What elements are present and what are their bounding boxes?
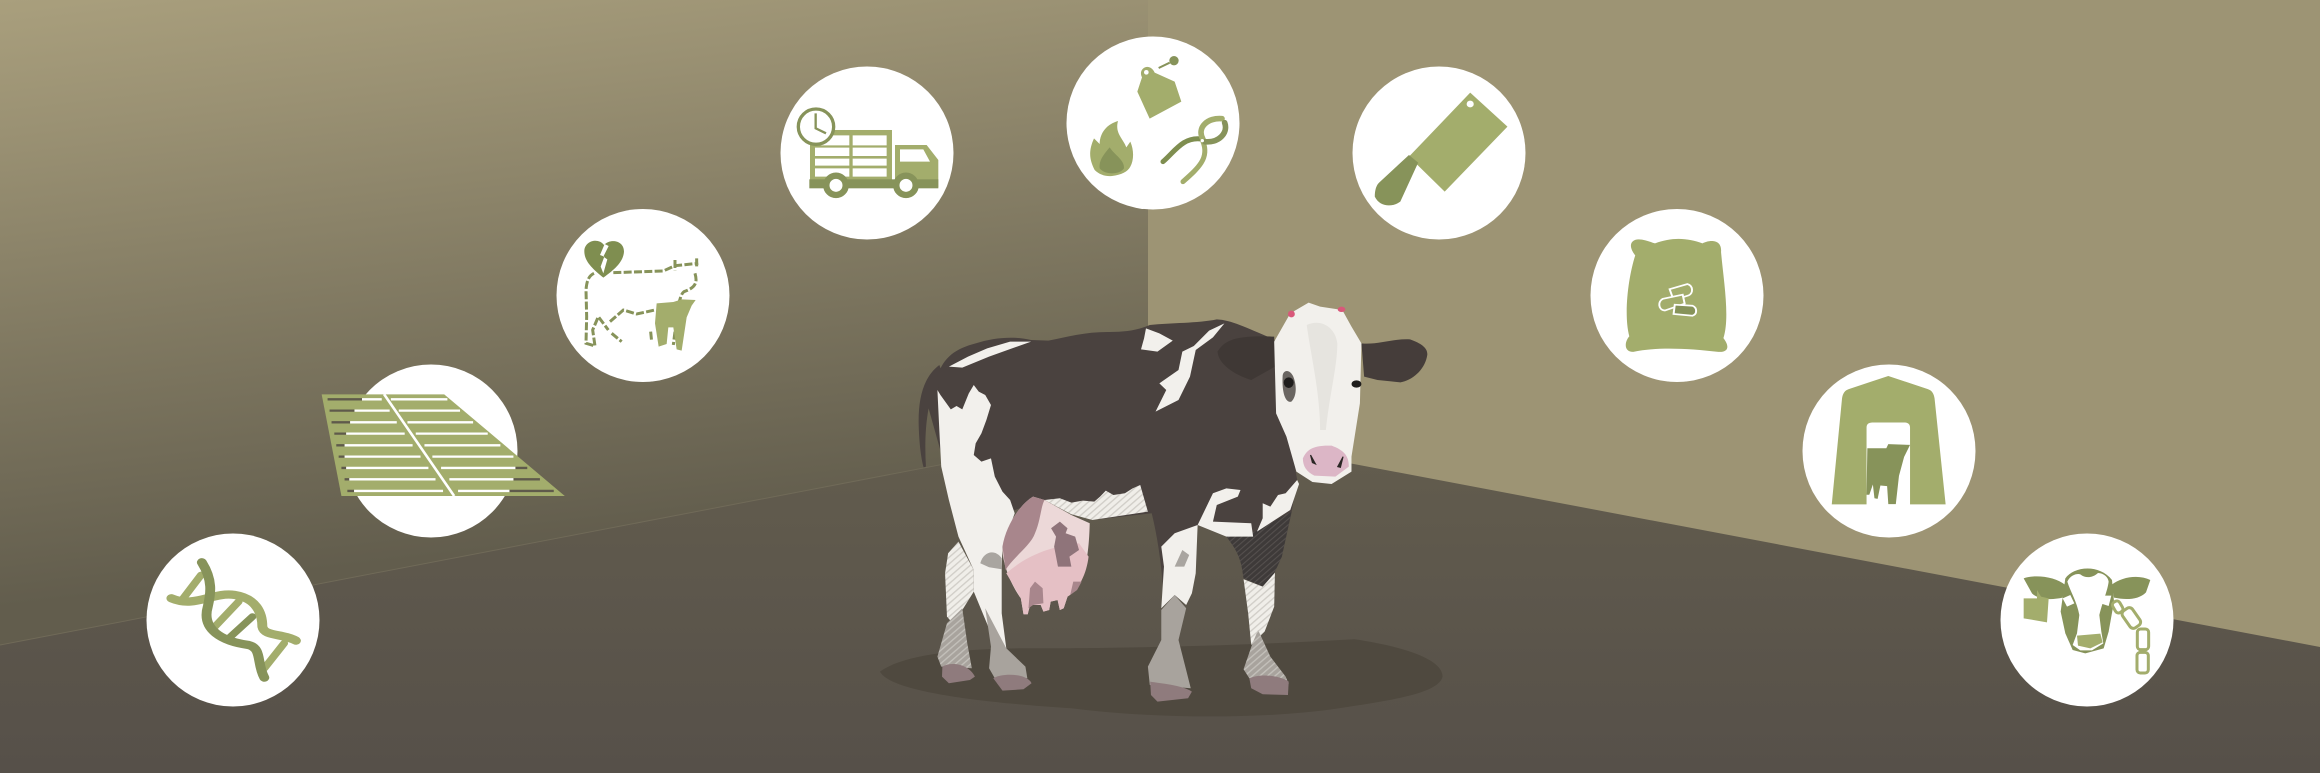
tail bbox=[919, 365, 945, 467]
circle: slatted floor bbox=[322, 364, 565, 538]
left ear bbox=[1218, 336, 1275, 380]
icon: DNA helix bbox=[171, 562, 296, 678]
body dark coat bbox=[937, 319, 1297, 600]
belly hatch bbox=[1045, 485, 1148, 520]
right ear bbox=[1361, 339, 1427, 382]
udder bbox=[1002, 497, 1090, 614]
icon: cleaver bbox=[1375, 93, 1507, 205]
circle: feed bbox=[1590, 209, 1764, 382]
icon: slatted floor panel bbox=[322, 394, 565, 496]
icon: truck with clock bbox=[798, 109, 938, 195]
circle: DNA genetics bbox=[146, 534, 320, 706]
icon: barn with calf bbox=[1832, 376, 1946, 504]
icon: broken heart, cow and calf bbox=[584, 241, 698, 351]
circle: transport time bbox=[780, 66, 954, 240]
head bbox=[1274, 303, 1361, 484]
front far leg hatched bbox=[1226, 512, 1291, 695]
far hind leg bbox=[937, 542, 975, 683]
circle: tethering and tagging bbox=[2000, 534, 2174, 706]
hind hoof bbox=[993, 675, 1032, 691]
hock mark bbox=[980, 552, 1002, 569]
chest white patches bbox=[1198, 480, 1299, 537]
circle: identification and dehorning bbox=[1066, 36, 1240, 210]
hind near lower leg bbox=[985, 608, 1027, 678]
circle: slaughter bbox=[1352, 66, 1526, 240]
hind near leg and rump white bbox=[937, 385, 1015, 648]
circle: calf separation bbox=[556, 209, 730, 382]
circle: housing bbox=[1802, 364, 1976, 538]
back white marks bbox=[949, 323, 1224, 412]
front near leg bbox=[1148, 525, 1198, 702]
icon: cow head with tag and chain bbox=[2024, 569, 2150, 673]
icon: ear tag, flame and pliers bbox=[1090, 56, 1226, 182]
cow bbox=[919, 303, 1427, 702]
icon: feed sack with pellets bbox=[1626, 239, 1727, 352]
cow shadow bbox=[880, 639, 1443, 716]
